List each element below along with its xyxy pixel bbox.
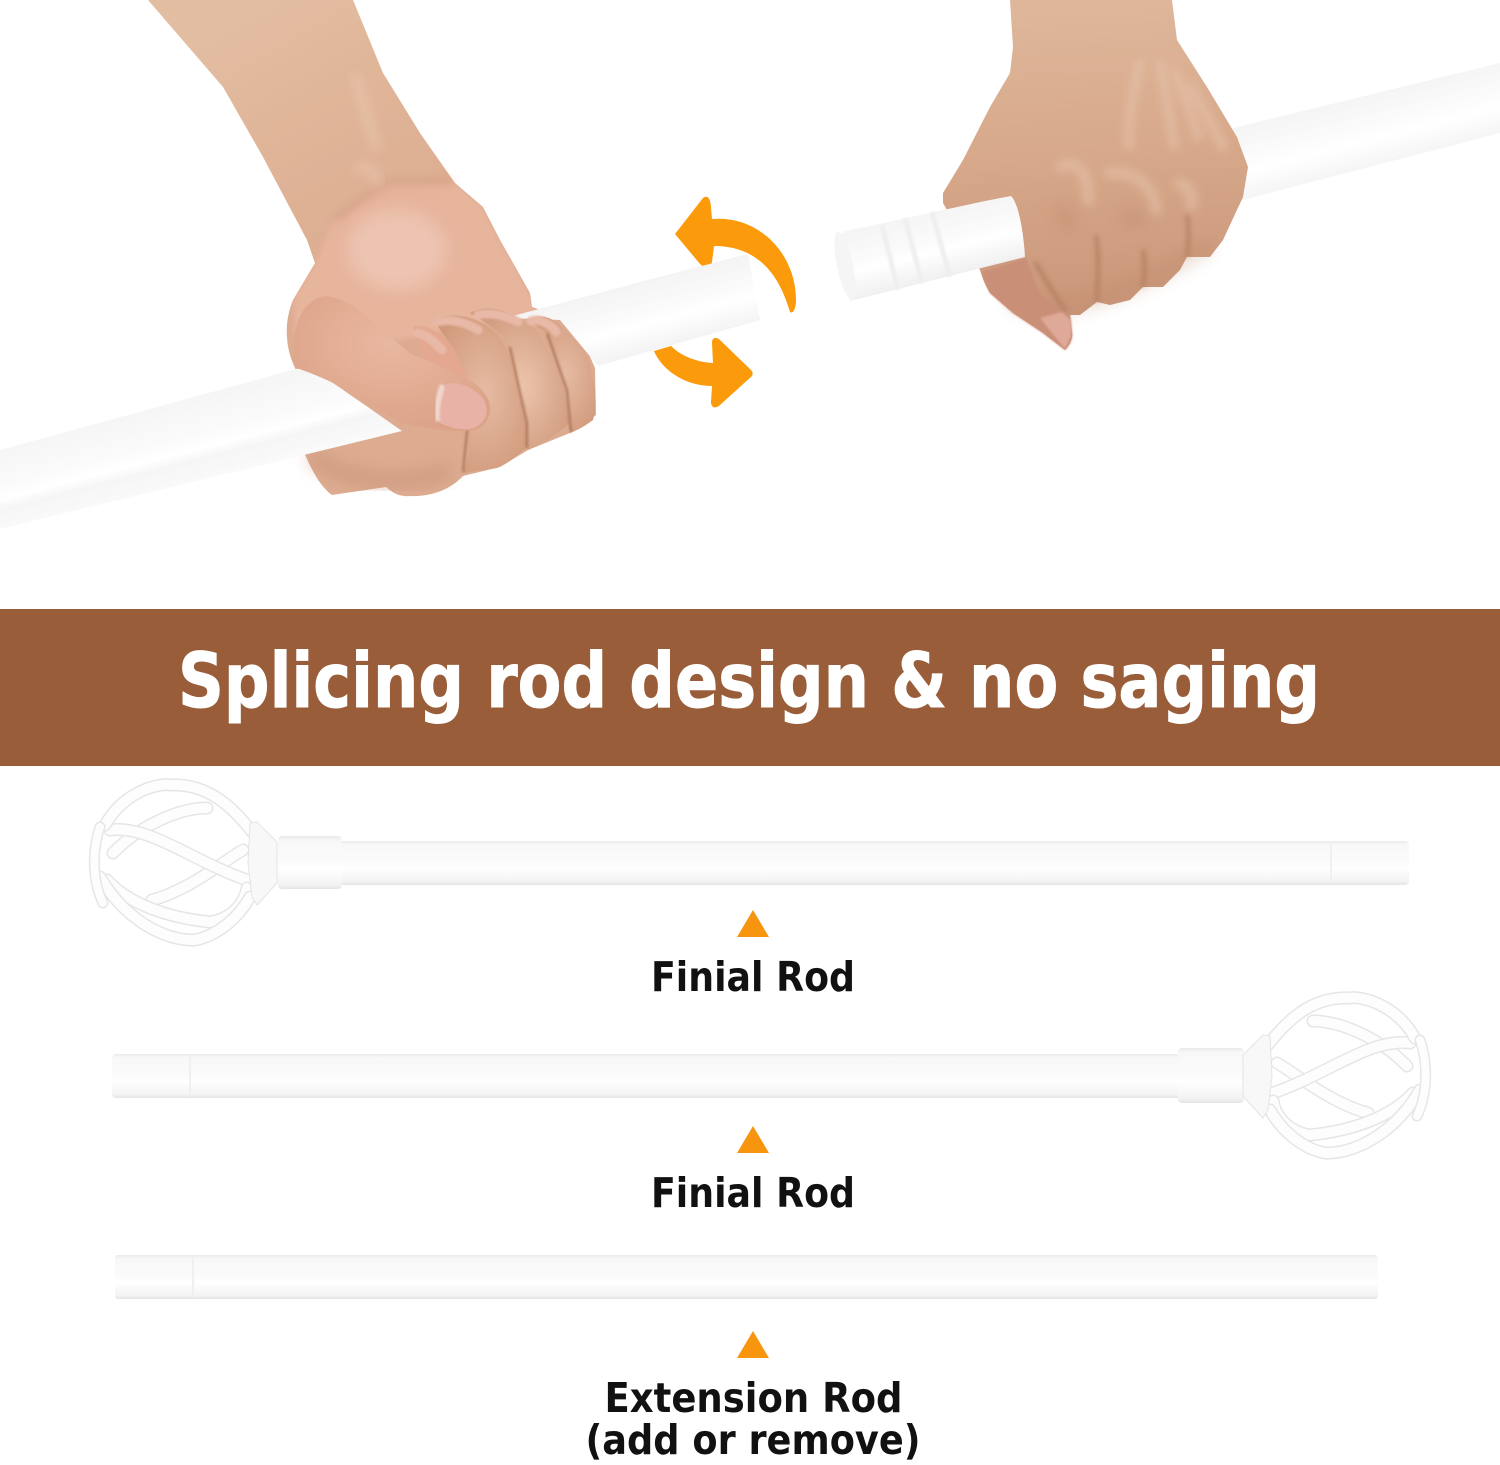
right thumb (982, 258, 1072, 350)
basket finial bands (94, 785, 253, 940)
right rod, outer section (1225, 63, 1500, 202)
palm highlight (347, 210, 447, 290)
left thumbnail (437, 383, 487, 429)
mirrored basket finial (1243, 998, 1426, 1153)
left middle finger (470, 309, 570, 450)
left forearm and palm (148, 0, 596, 496)
rod joint line (192, 1256, 194, 1298)
thumbnail base (437, 385, 443, 421)
left thumb (293, 296, 490, 431)
title banner (0, 609, 1500, 766)
label: finial rod 1: Finial Rod (651, 953, 855, 1001)
inner fingertip (413, 326, 470, 385)
right connector ridges (882, 212, 950, 290)
forearm tendon highlights (355, 75, 378, 185)
lower hand shading (1010, 245, 1210, 308)
left rod, connector section (505, 254, 760, 366)
rotation arrows (654, 197, 796, 407)
finger shading (1035, 215, 1189, 312)
tendons (1129, 60, 1225, 150)
wrist crease (335, 182, 452, 220)
rod joint line (189, 1055, 191, 1097)
pointer triangle 3 (737, 1331, 769, 1358)
label: finial rod 2: Finial Rod (651, 1169, 855, 1217)
photo: left hand gripping rod (0, 0, 669, 514)
lower curved arrow (654, 338, 753, 407)
knuckles (1057, 164, 1192, 215)
photo: right hand gripping rod (830, 0, 1500, 350)
right rod end cap (830, 230, 860, 302)
rod tube (338, 841, 1409, 885)
knuckle blush (1060, 205, 1145, 230)
left index finger (433, 315, 527, 473)
banner heading: Splicing rod design & no saging (178, 636, 1320, 725)
finial ferrule (1243, 1035, 1272, 1118)
label: add or remove: (add or remove) (586, 1416, 920, 1464)
rod joint line (1330, 842, 1332, 884)
right hand and forearm (943, 0, 1248, 350)
collar (1178, 1048, 1244, 1103)
left ring finger (528, 316, 596, 433)
rod tube (112, 1054, 1182, 1098)
bottom finial rod (112, 998, 1426, 1153)
pointer triangle 1 (737, 910, 769, 937)
upper curved arrow (675, 197, 796, 312)
finial bands (1267, 998, 1426, 1153)
left finger creases (463, 333, 571, 472)
left rod tip overlapping arrow (640, 254, 760, 348)
top finial rod (94, 785, 1409, 940)
label: extension rod: Extension Rod (604, 1374, 902, 1422)
right rod, connector section (838, 196, 1025, 301)
lower palm shading (310, 455, 450, 481)
pointer triangle 2 (737, 1126, 769, 1153)
finial ferrule (248, 822, 277, 905)
extension rod (115, 1255, 1378, 1299)
left rod, outer section (0, 368, 402, 529)
left fingertips (418, 314, 556, 350)
palm tone (293, 183, 535, 340)
collar (278, 836, 342, 889)
rod tube (115, 1255, 1378, 1299)
right thumb tip (1040, 312, 1071, 349)
